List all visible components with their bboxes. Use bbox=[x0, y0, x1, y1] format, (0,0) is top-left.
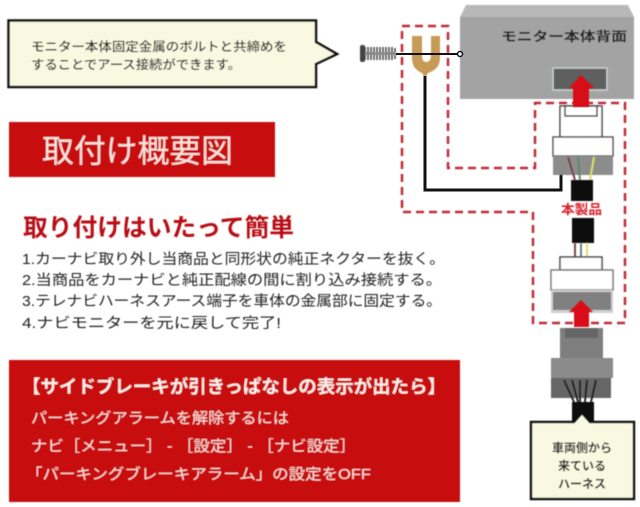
earth wire: terminal to connector bbox=[425, 76, 561, 190]
monitor port bbox=[553, 68, 607, 90]
callout: vehicle-side harness bbox=[531, 413, 634, 499]
installation steps: 1.カーナビ取り外し当商品と同形状の純正ネクターを抜く。 bbox=[22, 251, 445, 268]
installation steps: 2.当商品をカーナビと純正配線の間に割り込み接続する。 bbox=[22, 272, 442, 289]
callout: earth connection note: モニター本体固定金属のボルトと共締めを bbox=[31, 39, 287, 54]
earth wire: screw to monitor bbox=[396, 52, 462, 56]
vehicle-side connector bbox=[551, 328, 613, 424]
lower connector bbox=[551, 243, 613, 313]
red dashed outline: earth terminal bbox=[402, 26, 625, 323]
upper connector bbox=[553, 106, 613, 180]
warning heading: 【サイドブレーキが引きっぱなしの表示が出たら】 bbox=[22, 376, 446, 397]
title banner: 取付け概要図 bbox=[42, 133, 233, 169]
product module (本製品) bbox=[561, 180, 602, 243]
warning instructions bbox=[26, 410, 371, 483]
callout: earth connection note: することでアース接続ができます。 bbox=[31, 57, 241, 72]
warning instructions: 「パーキングブレーキアラーム」の設定をOFF bbox=[26, 465, 371, 483]
monitor label: モニター本体背面 bbox=[501, 29, 627, 44]
red arrow: into lower connector bbox=[569, 300, 593, 327]
callout: vehicle-side harness: 来ている bbox=[558, 458, 606, 473]
callout: vehicle-side harness: 車両側から bbox=[552, 440, 612, 455]
product module (本製品): 本製品 bbox=[561, 202, 602, 217]
icon: screw bbox=[360, 45, 396, 62]
warning instructions: パーキングアラームを解除するには bbox=[31, 410, 289, 427]
installation steps: 3.テレナビハーネスアース端子を車体の金属部に固定する。 bbox=[22, 293, 442, 310]
icon: U terminal bbox=[412, 36, 440, 78]
heading: easy installation: 取り付けはいたって簡単 bbox=[23, 214, 294, 242]
title banner bbox=[9, 122, 275, 177]
monitor back bbox=[460, 5, 634, 99]
installation steps: 4.ナビモニターを元に戻して完了! bbox=[22, 315, 281, 332]
callout: earth connection note bbox=[8, 20, 337, 87]
red arrow: into monitor bbox=[569, 75, 594, 107]
warning instructions: ナビ［メニュー］ - ［設定］ - ［ナビ設定］ bbox=[31, 438, 356, 455]
callout: vehicle-side harness: ハーネス bbox=[558, 477, 606, 491]
installation steps bbox=[22, 251, 445, 332]
panel: parking brake warning bbox=[9, 360, 460, 502]
